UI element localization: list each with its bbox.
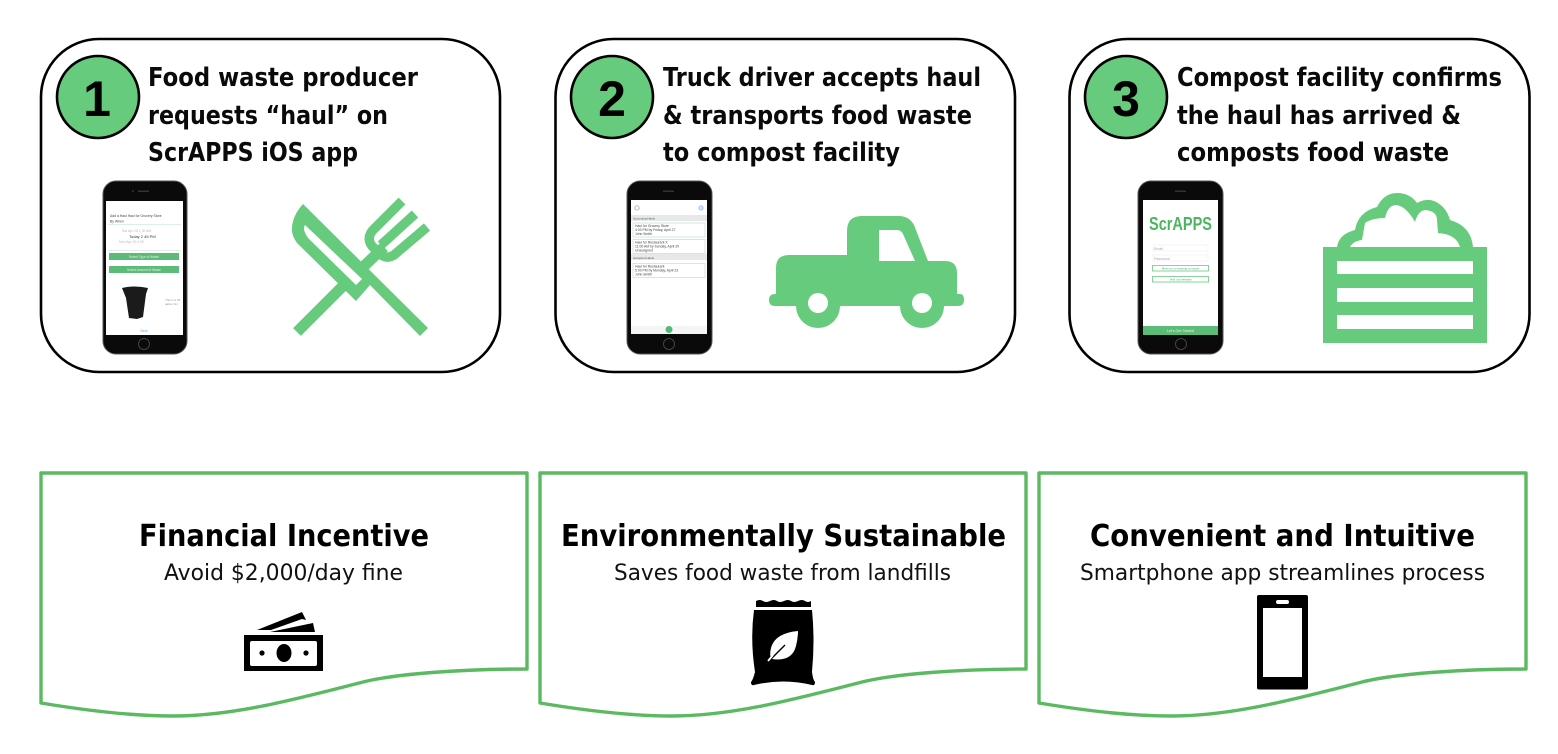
step 1 text: ScrAPPS iOS app (148, 138, 358, 168)
phone: haul list screen: Haul for Grocery Store (635, 224, 669, 228)
phone: haul list screen: Unassigned (635, 248, 653, 252)
phone: haul request screen: This is a 96 (165, 298, 181, 302)
heading: environmentally sustainable: Environmentally Sustainable (561, 519, 1006, 554)
phone: haul list screen: 4:00 PM by Friday, April 27 (635, 228, 676, 232)
panel: step 3 (1070, 39, 1530, 372)
icon: waste bin (122, 286, 148, 319)
step 3 text: the haul has arrived & (1177, 101, 1461, 131)
badge: number 3: 3 (1112, 71, 1140, 127)
icon: knife and fork (292, 201, 428, 336)
phone: haul list screen: Accepted Hauls (633, 256, 655, 260)
heading: convenient and intuitive: Convenient and Intuitive (1090, 519, 1475, 554)
panel: financial incentive (41, 473, 527, 716)
phone: login screen (1138, 181, 1223, 354)
phone: login screen: Email (1154, 247, 1163, 251)
phone: haul request screen: Sat Apr 28 1 30 AM (122, 229, 151, 233)
step 2 text: Truck driver accepts haul (663, 63, 981, 93)
icon: compost bin (1323, 193, 1487, 343)
phone: haul list screen: Haul for Restaurant X (635, 240, 668, 244)
heading: financial incentive: Financial Incentive (139, 519, 429, 554)
step 3 text: Compost facility confirms (1177, 63, 1502, 93)
step 2 text: to compost facility (663, 138, 900, 168)
phone: haul request screen: gallon bin (165, 302, 178, 306)
badge: number 1: 1 (83, 71, 111, 127)
phone: haul list screen: Upcoming Hauls (633, 216, 656, 220)
icon: money (244, 612, 323, 671)
phone: haul list screen: 5:00 PM by Monday, April 23 (635, 268, 678, 272)
panel: convenient and intuitive (1039, 473, 1526, 716)
phone: login screen: Let's Get Started (1167, 329, 1194, 333)
step 3 text (1177, 63, 1502, 168)
panel: step 1 (41, 39, 500, 372)
phone: haul request screen: Next (141, 329, 148, 333)
icon: smartphone (1257, 595, 1308, 690)
phone: haul request screen: By When (110, 220, 124, 224)
phone: haul list screen: 11:00 AM by Sunday, April 29 (635, 244, 679, 248)
phone: haul request screen: Select Amount of Waste (127, 268, 161, 272)
badge: number 2 (571, 56, 653, 138)
badge: number 3 (1085, 56, 1167, 138)
step 1 text: Food waste producer (148, 63, 418, 93)
badge: number 2: 2 (598, 71, 626, 127)
phone: login screen: Password (1154, 257, 1170, 261)
phone: haul request screen: Today 2 45 PM (129, 234, 156, 239)
phone: haul list screen: John Smith (635, 232, 652, 236)
step 3 text: composts food waste (1177, 138, 1449, 168)
phone: login screen: Visit our website (1170, 278, 1192, 282)
phone: haul request screen: Mon Apr 30 4 00 (119, 240, 144, 244)
icon: pickup truck (769, 216, 964, 328)
phone: login screen: ScrAPPS (1149, 214, 1212, 234)
phone: haul request screen (103, 181, 187, 354)
phone: haul list screen (627, 181, 712, 354)
phone: haul request screen: Select Type of Waste (129, 255, 159, 259)
step 1 text (148, 63, 418, 168)
icon: compost bag (751, 600, 815, 685)
text: avoid fine: Avoid $2,000/day fine (164, 560, 403, 586)
phone: login screen: Meet us on landing or report (1162, 266, 1199, 270)
text: smartphone app: Smartphone app streamlines process (1080, 560, 1485, 586)
step 2 text: & transports food waste (663, 101, 972, 131)
panel: step 2 (556, 39, 1015, 372)
phone: haul request screen: Add a Haul Haul for Grocery Store (110, 214, 162, 218)
step 2 text (663, 63, 981, 168)
panel: environmentally sustainable (540, 473, 1026, 716)
text: saves food waste: Saves food waste from landfills (614, 560, 951, 586)
badge: number 1 (57, 56, 139, 138)
phone: haul list screen: Haul for Restaurant (635, 264, 664, 268)
step 1 text: requests “haul” on (148, 101, 388, 131)
phone: haul list screen: John Smith (635, 272, 652, 276)
